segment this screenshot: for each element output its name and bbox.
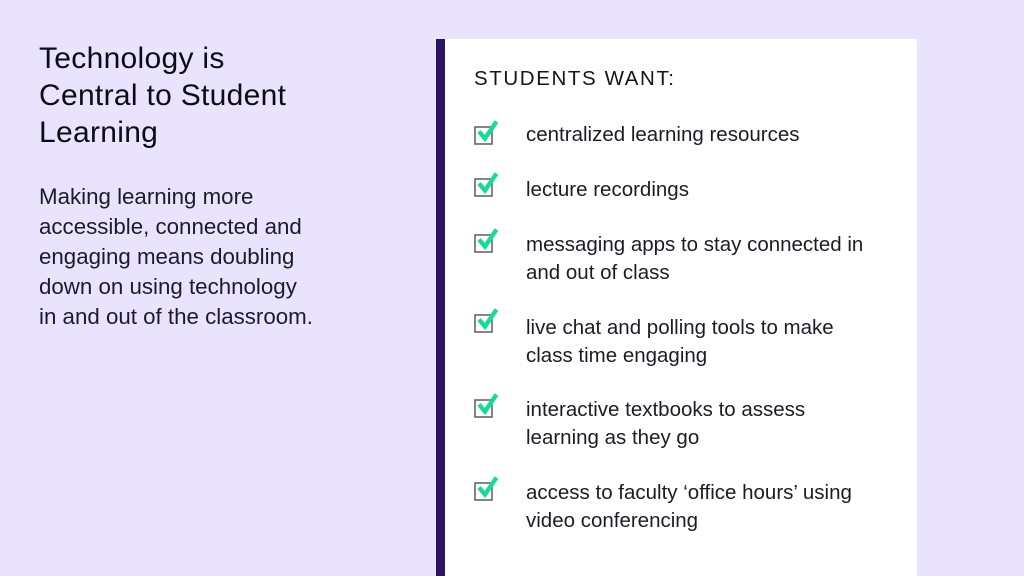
icon: check 1 [474, 120, 498, 145]
list item 2: lecture recordings [526, 178, 689, 201]
list item 3 [526, 233, 863, 284]
title [39, 42, 286, 149]
panel accent bar [436, 39, 445, 576]
panel heading: STUDENTS WANT: [474, 67, 676, 90]
list item 6: video conferencing [526, 508, 698, 532]
intro paragraph: in and out of the classroom. [39, 304, 313, 329]
panel: students want [436, 39, 917, 576]
icon: check 6 [474, 476, 498, 501]
list item 5 [526, 398, 805, 448]
list item 4: live chat and polling tools to make [526, 316, 834, 339]
title: Learning [39, 116, 158, 149]
icon: check 4 [474, 308, 498, 333]
list item 4: class time engaging [526, 344, 707, 366]
intro paragraph: Making learning more [39, 184, 253, 209]
list item 6 [526, 481, 852, 532]
list item 3: messaging apps to stay connected in [526, 233, 863, 256]
intro paragraph: engaging means doubling [39, 244, 294, 269]
icon: check 5 [474, 393, 498, 418]
title: Central to Student [39, 79, 286, 112]
icon: check 2 [474, 172, 498, 197]
intro paragraph: accessible, connected and [39, 214, 302, 239]
icon: check 3 [474, 228, 498, 253]
title: Technology is [39, 42, 225, 75]
list item 5: interactive textbooks to assess [526, 398, 805, 421]
list item 1: centralized learning resources [526, 123, 799, 146]
list item 5: learning as they go [526, 426, 699, 448]
intro paragraph: down on using technology [39, 274, 297, 299]
list item 4 [526, 316, 834, 366]
list item 6: access to faculty ‘office hours’ using [526, 481, 852, 504]
intro paragraph [39, 184, 313, 329]
list item 3: and out of class [526, 260, 670, 284]
